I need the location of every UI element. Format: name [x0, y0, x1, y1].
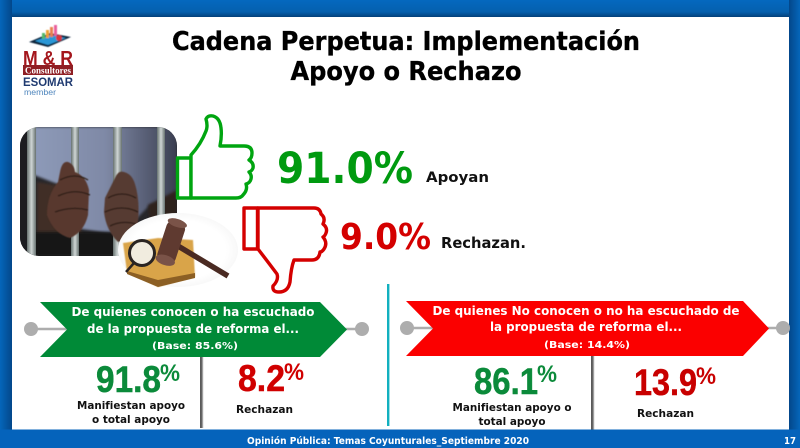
- book: [123, 238, 195, 287]
- panel: people who do not know the proposal: [400, 301, 790, 430]
- support label: o total apoyo: [92, 414, 170, 426]
- footer text: Opinión Pública: Temas Coyunturales_Septiembre 2020: [247, 435, 529, 447]
- gavel: [178, 246, 228, 276]
- reject value: 9.0% Rechazan.: Rechazan.: [441, 234, 526, 252]
- support label: total apoyo: [478, 416, 546, 428]
- title: Apoyo o Rechazo: [290, 57, 522, 87]
- logo text: M & R: M & R: [23, 48, 73, 70]
- support label: [452, 402, 572, 428]
- support figure: 91.8%: 91.8: [96, 359, 161, 400]
- magnifying glass: [130, 240, 154, 266]
- red banner: [406, 301, 769, 356]
- icon: thumbs down: [244, 208, 327, 292]
- support value: 91.0% Apoyan: Apoyan: [426, 170, 489, 186]
- support label: Manifiestan apoyo: [77, 400, 185, 412]
- support label: [77, 400, 185, 426]
- support figure: 86.1%: %: [537, 361, 557, 388]
- reject figure: 13.9%: 13.9: [634, 362, 697, 403]
- icon: logo tablet chart: [29, 25, 71, 47]
- green banner: de la propuesta de reforma el...: [87, 321, 299, 336]
- banner connectors: [400, 321, 790, 335]
- reject label: Rechazan: [236, 404, 293, 416]
- support figure: 86.1%: 86.1: [474, 361, 538, 402]
- icon: gavel, book and magnifying glass: [118, 213, 238, 287]
- vertical divider between panels: [387, 284, 389, 426]
- reject figure: 13.9%: %: [696, 363, 716, 390]
- title: Cadena Perpetua: Implementación: [172, 27, 640, 57]
- red banner: De quienes No conocen o no ha escuchado de: [432, 303, 740, 318]
- reject figure: 8.2%: %: [284, 359, 304, 386]
- footer bar: [0, 430, 800, 448]
- reject figure: 8.2%: 8.2: [238, 358, 285, 399]
- logo text: member: member: [24, 87, 56, 97]
- red banner: la propuesta de reforma el...: [490, 319, 682, 334]
- support value: 91.0% Apoyan: 91.0%: [277, 145, 413, 194]
- page number: 17: [784, 436, 796, 447]
- logo band: Consultores: Consultores: [25, 66, 71, 76]
- support label: Manifiestan apoyo o: [452, 402, 572, 414]
- logo text: ESOMAR: ESOMAR: [23, 75, 73, 89]
- title: [172, 27, 640, 87]
- photo: hands gripping prison bars: [20, 127, 177, 256]
- column divider: [200, 357, 203, 428]
- green banner: [40, 302, 347, 357]
- reject value: 9.0% Rechazan.: 9.0%: [340, 217, 431, 258]
- support value: 91.0% Apoyan: [277, 145, 489, 194]
- red banner: (Base: 14.4%): [544, 340, 630, 351]
- banner connectors: [24, 322, 369, 336]
- support figure: 91.8%: %: [160, 360, 180, 387]
- panel: people who know the proposal: [24, 302, 369, 428]
- green banner: De quienes conocen o ha escuchado: [72, 304, 315, 319]
- green banner: (Base: 85.6%): [152, 341, 238, 352]
- icon: thumbs up: [178, 116, 253, 198]
- column divider: [591, 356, 594, 430]
- reject value: 9.0% Rechazan.: [340, 217, 526, 258]
- logo: M&R Consultores ESOMAR member: [23, 25, 73, 97]
- reject label: Rechazan: [637, 408, 694, 420]
